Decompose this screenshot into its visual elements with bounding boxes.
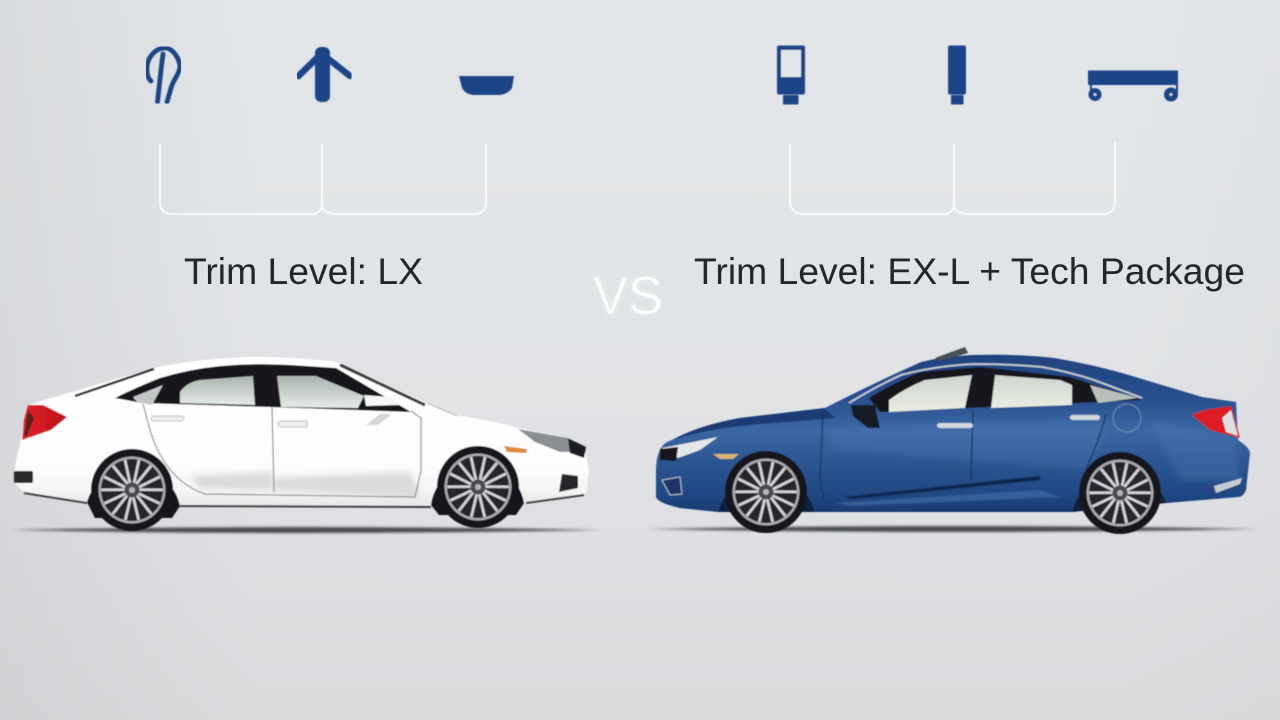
white car hood line <box>427 403 457 416</box>
white car wheel wells <box>87 464 524 518</box>
label: VS: VS <box>593 266 663 326</box>
white car rear reflector <box>14 471 33 483</box>
white car fog vent <box>559 474 578 492</box>
car: blue EX-L sedan <box>656 347 1250 534</box>
blue car fuel door <box>1113 404 1141 432</box>
blue car front window <box>889 375 972 412</box>
blue car handles <box>937 415 1100 428</box>
white car grille accent <box>568 438 586 458</box>
blue car door lines <box>820 410 1106 500</box>
blue car mirror <box>851 405 880 428</box>
white car handles <box>151 416 308 427</box>
white car amber marker <box>504 446 527 453</box>
label: VS: VS <box>593 266 663 326</box>
white car bumper and sill lines <box>24 493 584 507</box>
blue car lower sheen <box>835 490 1060 506</box>
blue car grille <box>660 447 678 461</box>
heading: Trim Level EX-L + Tech Package: Trim Level: EX-L + Tech Package <box>694 251 1245 292</box>
car: white LX sedan <box>14 357 589 531</box>
icon: usb stick <box>948 46 966 104</box>
blue car chrome trim <box>849 364 1142 403</box>
blue car headlight <box>662 437 718 458</box>
shadow: blue car ground <box>647 526 1257 532</box>
blue car door sheen <box>830 418 1110 470</box>
white car body <box>14 357 589 506</box>
icon: phone on base <box>777 46 805 104</box>
blue car rear quarter glass <box>1090 385 1138 403</box>
white car rear quarter glass <box>133 385 163 405</box>
white car tail light inner <box>24 410 34 436</box>
icon: seat belt loop <box>147 48 180 102</box>
bracket: EX-L features <box>790 142 1115 214</box>
white car rear wheel <box>91 449 173 531</box>
blue car roof antenna <box>935 347 968 361</box>
blue car rear bumper trim <box>1214 478 1242 493</box>
blue car amber marker <box>713 454 739 459</box>
white car window band <box>115 364 411 412</box>
icon: up arrow <box>298 47 350 102</box>
bracket: LX features <box>160 143 486 214</box>
blue car rear fender sheen <box>1150 420 1240 480</box>
icon: bowl <box>459 76 514 95</box>
blue car rear window <box>991 375 1072 408</box>
white car front window <box>277 376 364 408</box>
white car soft shading <box>190 472 420 497</box>
white car rear window <box>180 376 255 405</box>
white car windshield edge <box>340 365 425 405</box>
white car mirror <box>364 395 400 406</box>
white car headlight <box>518 429 572 452</box>
heading: Trim Level LX: Trim Level: LX <box>184 251 423 292</box>
blue car hood highlight <box>672 408 835 440</box>
blue car body <box>656 355 1250 512</box>
shadow: white car ground <box>10 527 601 533</box>
white car front wheel <box>437 446 519 528</box>
blue car rear wheel <box>1079 452 1161 534</box>
icon: cart with wheels <box>1088 70 1178 102</box>
blue car tail light inner <box>1222 410 1238 436</box>
white car mirror reflection <box>366 414 392 425</box>
blue car tail light <box>1192 406 1240 438</box>
blue car fog light <box>662 477 682 495</box>
white car tail light <box>22 405 67 440</box>
white car roof rail dark rear <box>75 369 154 396</box>
blue car wheel wells <box>718 472 1167 512</box>
blue car lower crease <box>845 476 1040 499</box>
blue car window band <box>869 367 1142 412</box>
blue car front wheel <box>725 451 807 533</box>
white car door lines <box>143 404 421 497</box>
